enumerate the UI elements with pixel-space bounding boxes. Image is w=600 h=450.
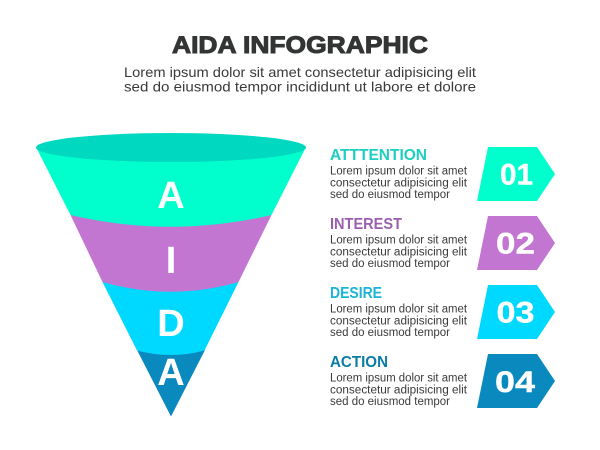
text: desire (330, 304, 468, 339)
arrow badge 01 (477, 147, 555, 201)
text: action: Lorem ipsum dolor sit amet (330, 372, 468, 384)
item: attention (330, 147, 555, 201)
arrow badge 04: 04 (495, 366, 536, 399)
text: attention: consectetur adipisicing elit (330, 178, 468, 190)
subtitle: sed do eiusmod tempor incididunt ut labore et dolore (124, 78, 476, 94)
funnel layer: interest (70, 215, 272, 292)
arrow badge 03: 03 (496, 296, 534, 330)
text: desire: sed do eiusmod tempor (330, 327, 450, 339)
subtitle: Lorem ipsum dolor sit amet consectetur adipisicing elit (124, 64, 476, 80)
heading: attention: ATTTENTION (330, 147, 427, 164)
heading: interest: INTEREST (330, 216, 402, 233)
text: action: consectetur adipisicing elit (330, 384, 468, 396)
item: desire (330, 285, 555, 339)
heading: desire: DESIRE (330, 285, 382, 302)
text: interest (330, 234, 468, 270)
arrow badge 04 (477, 354, 555, 408)
title: AIDA INFOGRAPHIC (172, 32, 428, 59)
subtitle (124, 64, 476, 94)
arrow badge 02 (477, 216, 555, 270)
funnel (36, 133, 306, 416)
funnel layer: desire: D (157, 303, 185, 345)
funnel layer: desire (102, 282, 238, 355)
item: interest (330, 216, 555, 270)
text: interest: sed do eiusmod tempor (330, 258, 450, 270)
funnel layer: action: A (157, 352, 185, 394)
text: attention (330, 166, 468, 201)
arrow badge 02: 02 (496, 228, 535, 260)
text: action: sed do eiusmod tempor (330, 396, 450, 408)
arrow badge 03 (477, 285, 555, 339)
item: action (330, 354, 555, 408)
text: attention: sed do eiusmod tempor (330, 189, 450, 201)
funnel layer: action (137, 350, 205, 416)
text: desire: consectetur adipisicing elit (330, 316, 468, 328)
text: action (330, 372, 468, 408)
funnel layer: attention (36, 133, 306, 227)
funnel layer: interest: I (166, 240, 176, 282)
funnel layer: attention: A (157, 175, 185, 217)
arrow badge 01: 01 (500, 158, 533, 192)
heading: action: ACTION (330, 354, 388, 371)
text: attention: Lorem ipsum dolor sit amet (330, 166, 468, 178)
text: interest: consectetur adipisicing elit (330, 246, 468, 258)
text: interest: Lorem ipsum dolor sit amet (330, 234, 468, 246)
text: desire: Lorem ipsum dolor sit amet (330, 304, 468, 316)
